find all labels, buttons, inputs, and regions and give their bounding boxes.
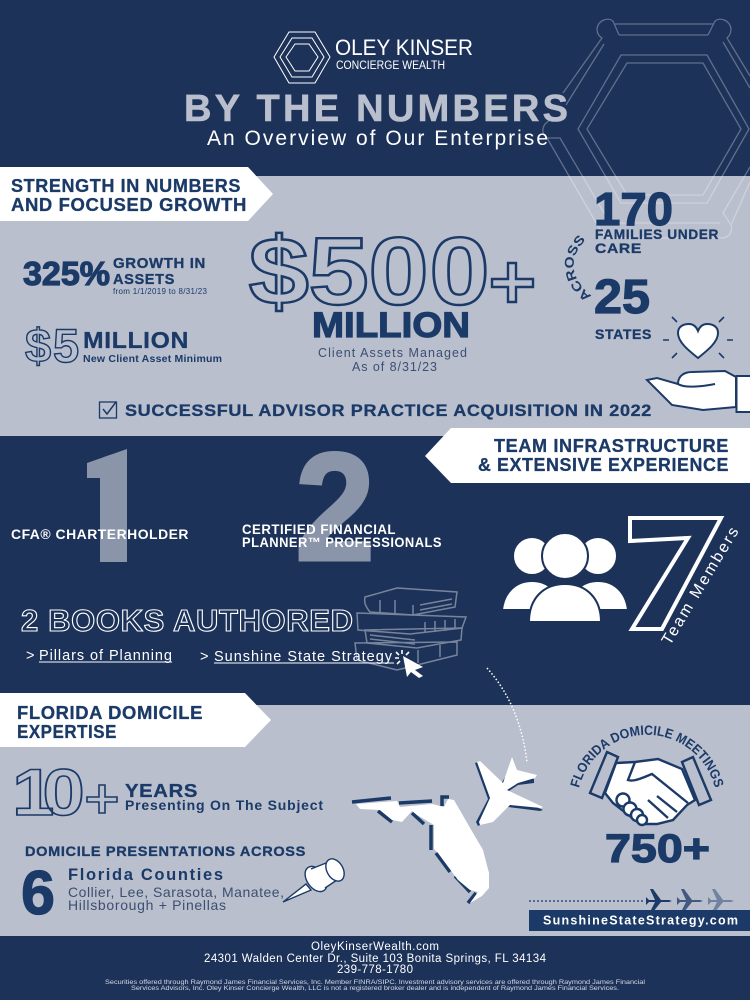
stat: 10+ years [12,757,323,830]
banner: florida domicile [0,693,271,747]
callout: acquisition: SUCCESSFUL ADVISOR PRACTICE ACQUISITION IN 2022 [125,402,652,420]
arc text: florida domicile meetings: FLORIDA DOMICILE MEETINGS [570,725,724,788]
stat: 6 florida counties: 6 [21,859,55,928]
logo mark [274,32,330,83]
footer disclosure: Services Advisors, Inc. Oley Kinser Concierge Wealth, LLC is not a registered broker dealer and is independent of Raymond James Financial Services. [131,986,619,992]
subtitle: An Overview of Our Enterprise [207,127,548,150]
flight path: dotted curve [487,668,527,762]
stat: 325% growth: ASSETS [113,272,175,288]
stat: 325% growth: from 1/1/2019 to 8/31/23 [113,287,208,296]
map: florida [352,797,489,903]
stat: 2 CFP professionals [242,421,442,593]
stat: $5 million minimum [25,319,222,372]
plane 1 [646,889,672,912]
plane 3 [708,889,734,912]
logo [274,32,473,83]
url bar: SunshineStateStrategy.com [543,914,738,928]
footer disclosure: Securities offered through Raymond James Financial Services, Inc. Member FINRA/SIPC. Investment advisory services are offered through Raymond James Financial [105,980,645,986]
stat: $5 million minimum: $5 [25,319,79,372]
stat: $500+ million: MILLION [312,306,470,345]
stat: across: ACROSS [564,236,592,300]
url bar [529,910,750,931]
stat: 170 families: FAMILIES UNDER [595,226,719,242]
plane 2 [677,889,703,912]
heading: 2 books authored: 2 BOOKS AUTHORED [21,603,353,638]
banner: team infrastructure: & EXTENSIVE EXPERIENCE [478,455,729,475]
footer contact [204,941,547,976]
icon: heart with rays [663,317,733,358]
stat: 6 florida counties [21,843,306,928]
banner: strength in numbers: AND FOCUSED GROWTH [11,195,247,215]
footer contact: 24301 Walden Center Dr., Suite 103 Bonita Springs, FL 34134 [204,953,547,965]
stat: 10+ years: Presenting On The Subject [125,797,323,813]
stat: $500+ million [249,217,533,374]
stat: $5 million minimum: MILLION [83,327,189,353]
link: Sunshine State Strategy: > [200,649,208,665]
stat: 6 florida counties: Hillsborough + Pinellas [68,897,226,913]
icon: airplane [475,757,543,826]
florida shape [356,799,489,903]
footer disclosure [105,980,645,992]
icon: checkbox [100,402,116,418]
stat: 170 families [594,183,719,256]
stat: 6 florida counties: Collier, Lee, Sarasota, Manatee, [68,884,284,900]
stat: 170 families: 170 [594,183,673,235]
stat: 25 states: STATES [595,326,652,342]
watermark: hexagon logo [543,19,750,238]
stat: $500+ million: Client Assets Managed [318,346,467,360]
stat: 25 states [594,271,652,342]
icon: push pin [283,856,348,902]
icon: team people [502,533,628,622]
stat: $5 million minimum: New Client Asset Minimum [83,353,222,365]
footer [0,936,750,1000]
stat: 6 florida counties: DOMICILE PRESENTATIONS ACROSS [25,843,306,859]
banner: florida domicile: EXPERTISE [17,722,117,742]
stat: 6 florida counties: Florida Counties [68,866,223,884]
florida shadow [352,797,476,903]
stat: $500+ million: As of 8/31/23 [352,360,437,374]
stat: 325% growth: GROWTH IN [113,256,206,272]
banner: florida domicile: FLORIDA DOMICILE [17,703,203,723]
stat: 750+: 750+ [605,827,710,871]
stat: 25 states: 25 [594,271,650,324]
stat: 2 CFP professionals: CERTIFIED FINANCIAL [242,522,396,537]
stat: 10+ years: 10 [12,757,85,830]
flight line with planes [529,889,734,912]
banner: team infrastructure: TEAM INFRASTRUCTURE [494,436,729,456]
band: team background [0,436,750,705]
icon: book stack [355,588,466,670]
link: Sunshine State Strategy: Sunshine State Strategy [214,649,393,665]
banner: strength in numbers [0,167,273,221]
stat: 1 CFA charterholder: CFA® CHARTERHOLDER [11,527,189,542]
logo name: OLEY KINSER [335,35,473,60]
stat: 7 team members: Team Members [659,524,742,648]
footer contact: 239-778-1780 [337,964,413,976]
logo tagline: CONCIERGE WEALTH [336,60,445,72]
link: Pillars of Planning: Pillars of Planning [39,648,172,664]
stat: 1 CFA charterholder: 1 [70,422,157,596]
stat: 325% growth [23,255,208,296]
link: Pillars of Planning: > [26,648,34,664]
stat: 325% growth: 325% [23,255,110,292]
icon: cursor click [395,650,423,678]
banner: strength in numbers: STRENGTH IN NUMBERS [11,176,241,196]
stat: 1 CFA charterholder [12,449,188,562]
stat: 10+ years: YEARS [125,780,198,801]
stat: 2 CFP professionals: 2 [295,421,375,593]
icon: open hand [647,371,750,412]
icon: handshake [590,752,711,825]
footer contact: OleyKinserWealth.com [311,941,439,953]
stat: 170 families: CARE [595,240,642,256]
stat: 2 CFP professionals: PLANNER™ PROFESSIONALS [242,535,442,550]
title: BY THE NUMBERS [184,88,568,130]
stat: $500+ million: $500 [249,217,490,325]
banner: team infrastructure [425,428,750,483]
